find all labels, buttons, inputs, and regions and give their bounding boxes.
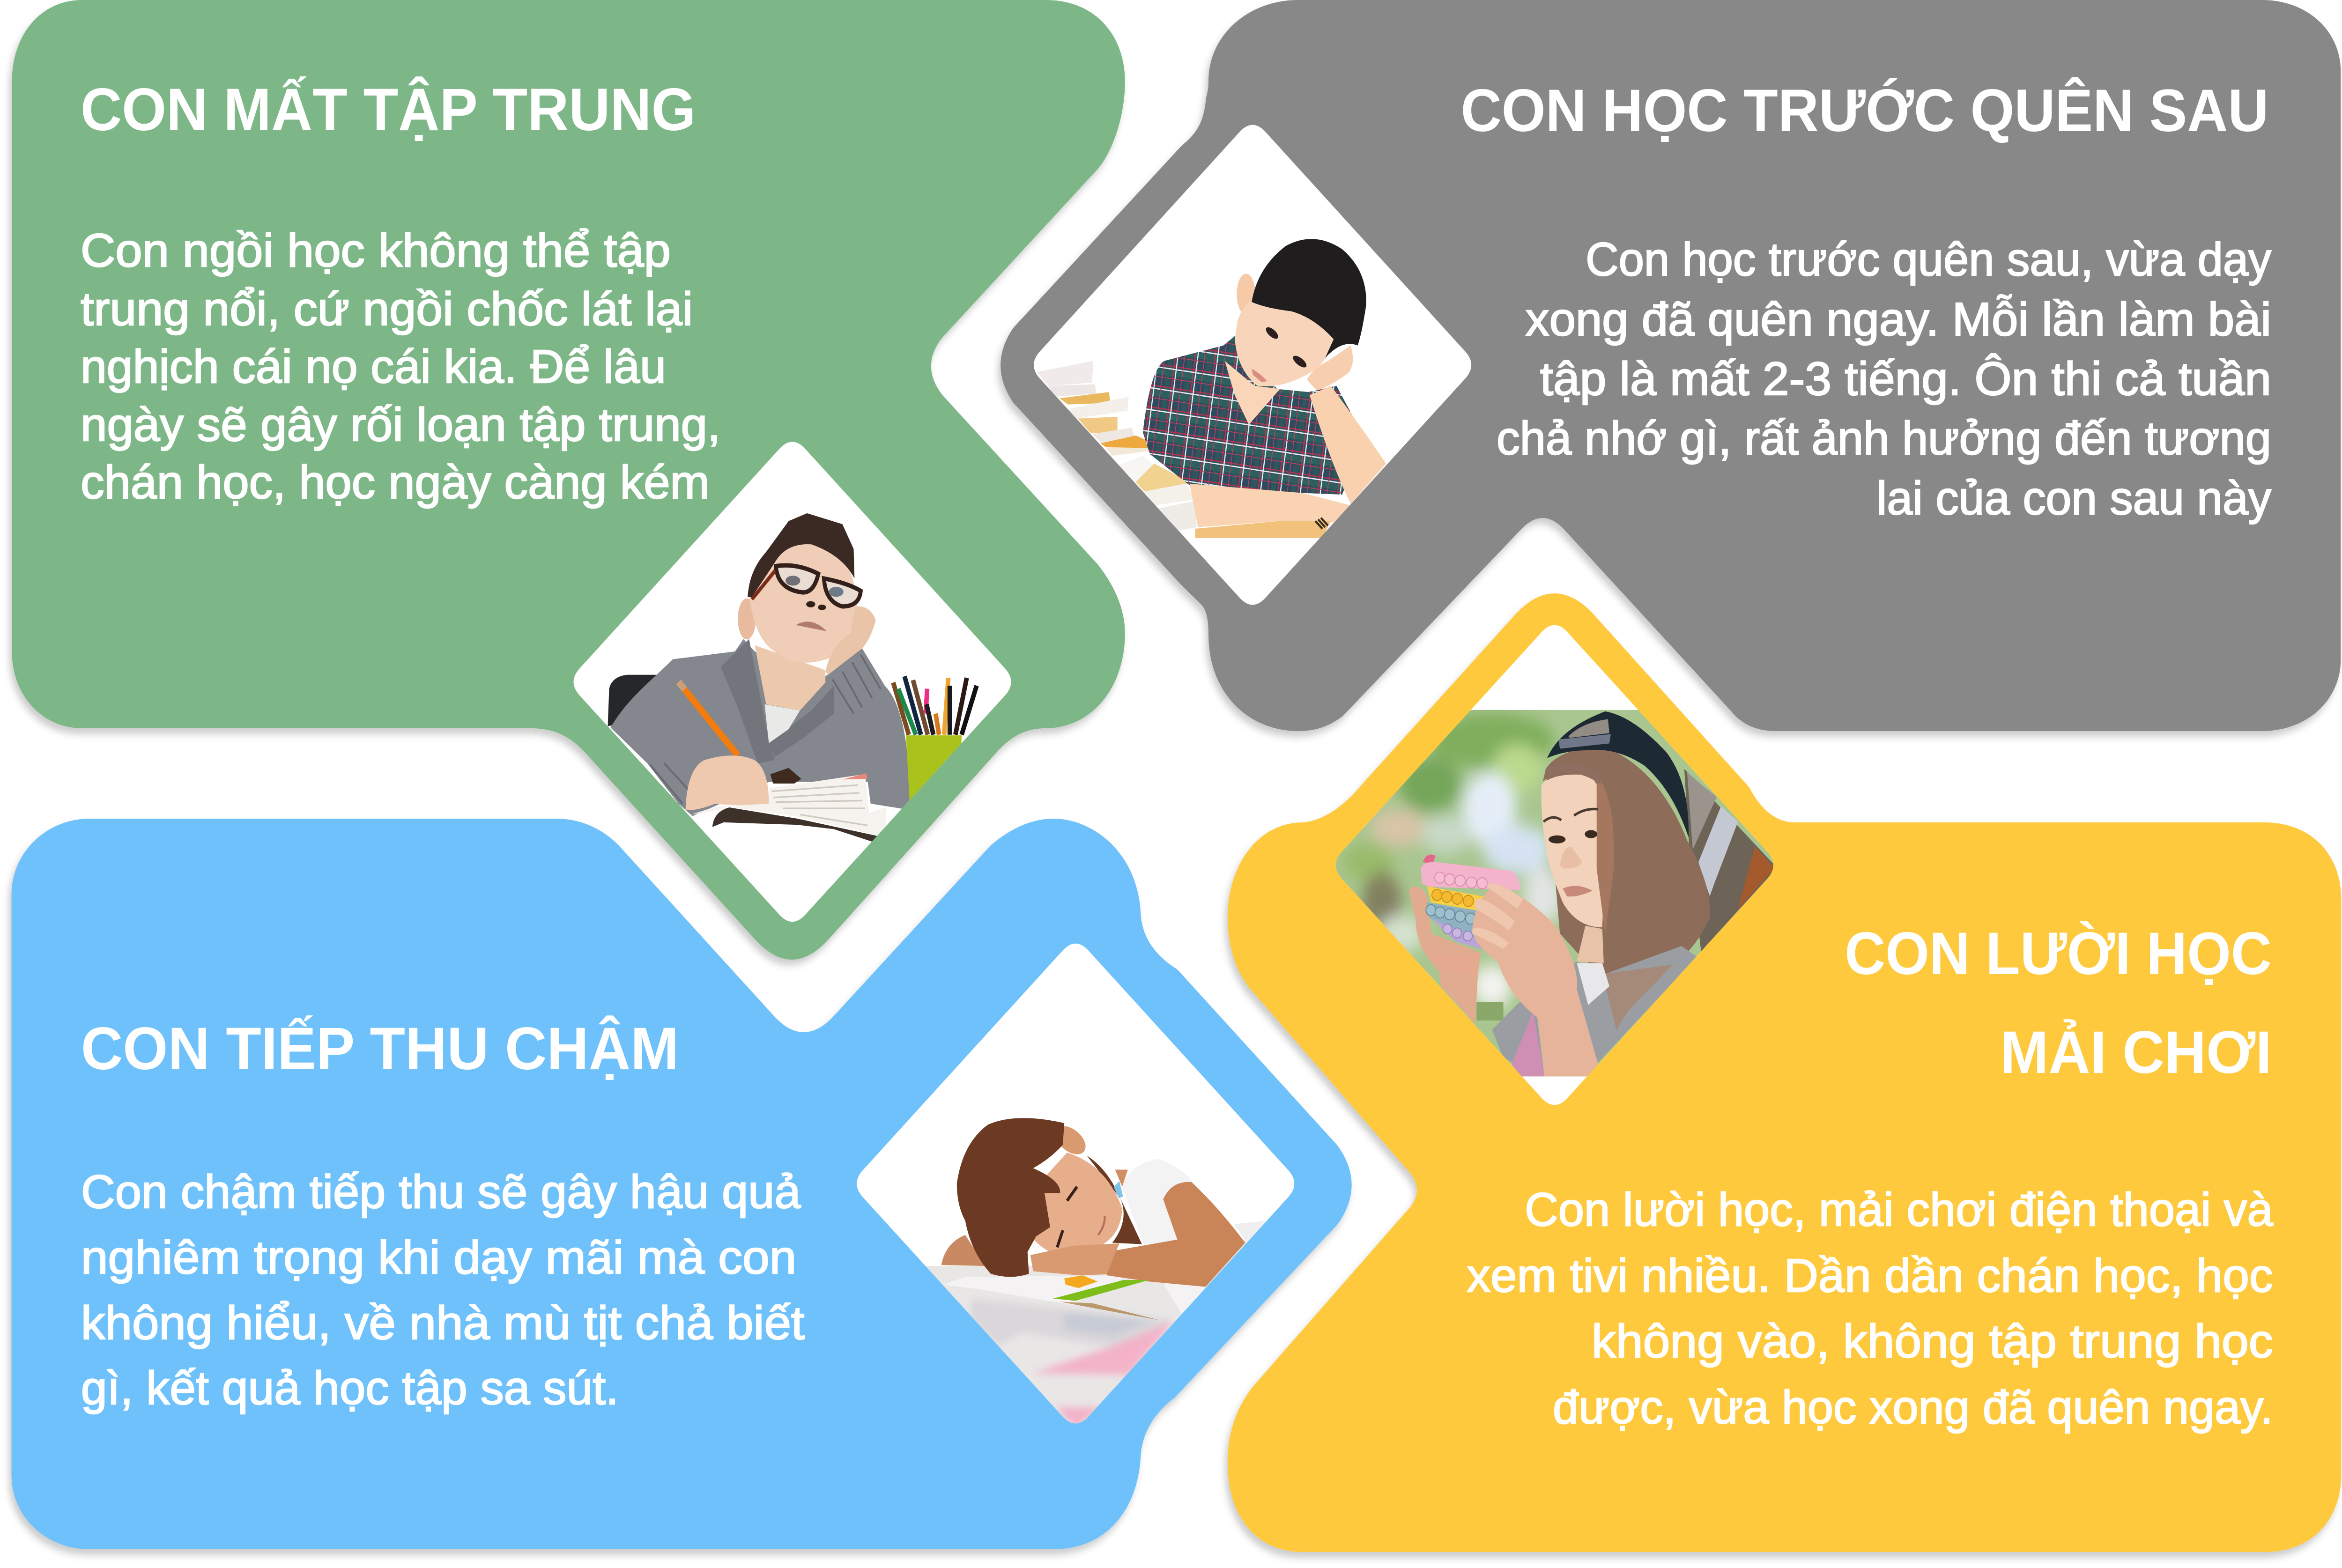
photo: girl sleeping on desk bbox=[852, 944, 1296, 1428]
body text: xem tivi nhiều. Dần dần chán học, học bbox=[1467, 1250, 2273, 1302]
panel shape: gray bbox=[1001, 0, 2341, 731]
body text bbox=[81, 1166, 805, 1414]
panel: con lười học mải chơi bbox=[1228, 593, 2341, 1552]
body text: Con lười học, mải chơi điện thoại và bbox=[1525, 1183, 2273, 1236]
panel: con tiếp thu chậm bbox=[12, 819, 1352, 1549]
body text: trung nổi, cứ ngồi chốc lát lại bbox=[81, 283, 693, 335]
body text: Con chậm tiếp thu sẽ gây hậu quả bbox=[81, 1166, 801, 1218]
photo: girl playing with phone bbox=[1334, 625, 1778, 1105]
panel shape: green bbox=[12, 0, 1125, 960]
body text: được, vừa học xong đã quên ngay. bbox=[1553, 1381, 2273, 1434]
body text: gì, kết quả học tập sa sút. bbox=[81, 1362, 619, 1414]
heading: CON HỌC TRƯỚC QUÊN SAU bbox=[1461, 77, 2269, 144]
body text: chán học, học ngày càng kém bbox=[81, 456, 710, 509]
body text: xong đã quên ngay. Mỗi lần làm bài bbox=[1526, 293, 2271, 346]
panel shape: yellow bbox=[1228, 593, 2341, 1552]
body text bbox=[81, 224, 720, 509]
body text: Con học trước quên sau, vừa dạy bbox=[1586, 233, 2271, 286]
body text: tập là mất 2-3 tiếng. Ôn thi cả tuần bbox=[1540, 353, 2271, 405]
panel shape: blue bbox=[12, 819, 1352, 1549]
heading: CON MẤT TẬP TRUNG bbox=[81, 76, 696, 143]
photo: boy with glasses thinking bbox=[573, 442, 1011, 922]
body text: Con ngồi học không thể tập bbox=[81, 224, 671, 277]
body text: nghiêm trọng khi dạy mãi mà con bbox=[81, 1231, 796, 1284]
heading bbox=[1845, 920, 2272, 1086]
heading: CON LƯỜI HỌC bbox=[1845, 920, 2272, 987]
panel: con mất tập trung bbox=[12, 0, 1125, 960]
body text: ngày sẽ gây rối loạn tập trung, bbox=[81, 399, 720, 451]
body text: nghịch cái nọ cái kia. Để lâu bbox=[81, 340, 666, 393]
body text: không hiểu, về nhà mù tịt chả biết bbox=[81, 1297, 805, 1349]
body text: lai của con sau này bbox=[1877, 472, 2271, 525]
photo: boy in plaid shirt with books bbox=[1034, 125, 1471, 605]
panel: con học trước quên sau bbox=[1001, 0, 2341, 731]
body text: chả nhớ gì, rất ảnh hưởng đến tương bbox=[1497, 412, 2271, 465]
body text: không vào, không tập trung học bbox=[1592, 1315, 2273, 1368]
heading: MẢI CHƠI bbox=[2000, 1019, 2272, 1086]
body text bbox=[1467, 1183, 2273, 1434]
heading: CON TIẾP THU CHẬM bbox=[81, 1015, 679, 1082]
body text bbox=[1497, 233, 2271, 525]
